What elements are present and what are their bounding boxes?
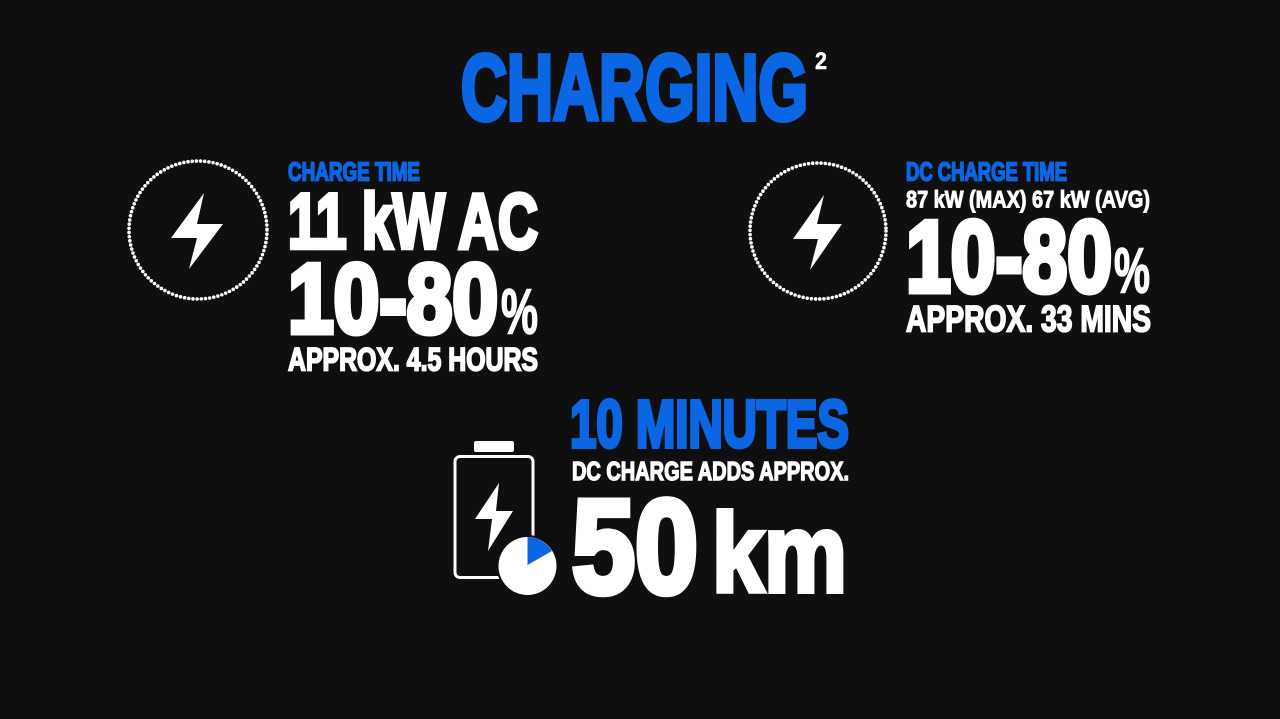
title: CHARGING: [461, 36, 808, 140]
text: 11 kW AC: 11 kW AC: [288, 177, 538, 265]
text: km: km: [712, 492, 847, 616]
heading: DC charge time: DC CHARGE TIME: [906, 156, 1067, 186]
text: 10-80%: %: [501, 276, 538, 348]
text: approx 33 mins: APPROX. 33 MINS: [906, 298, 1151, 340]
text: power max and average: 87 kW (MAX) 67 kW (AVG): [906, 186, 1150, 214]
panel: 10 minute DC charge: [455, 387, 849, 622]
icon: battery with bolt and pie: [455, 441, 558, 597]
icon: dotted circle with bolt: [129, 161, 267, 299]
text: approx 4.5 hours: APPROX. 4.5 HOURS: [288, 342, 538, 378]
icon: dotted circle with bolt: [750, 163, 886, 299]
title: 2: [815, 48, 827, 75]
text: 50: 50: [572, 474, 698, 622]
panel: AC charge time: [129, 156, 538, 378]
text: DC charge adds approx: DC CHARGE ADDS APPROX.: [572, 456, 849, 486]
heading: charge time: CHARGE TIME: [288, 156, 420, 186]
heading: 10 minutes: 10 MINUTES: [570, 387, 849, 462]
panel: DC charge time: [750, 156, 1151, 340]
text: 10-80%: 10-80: [288, 244, 498, 354]
text: 10-80%: 10-80: [906, 202, 1112, 314]
text: 10-80%: %: [1114, 234, 1150, 306]
